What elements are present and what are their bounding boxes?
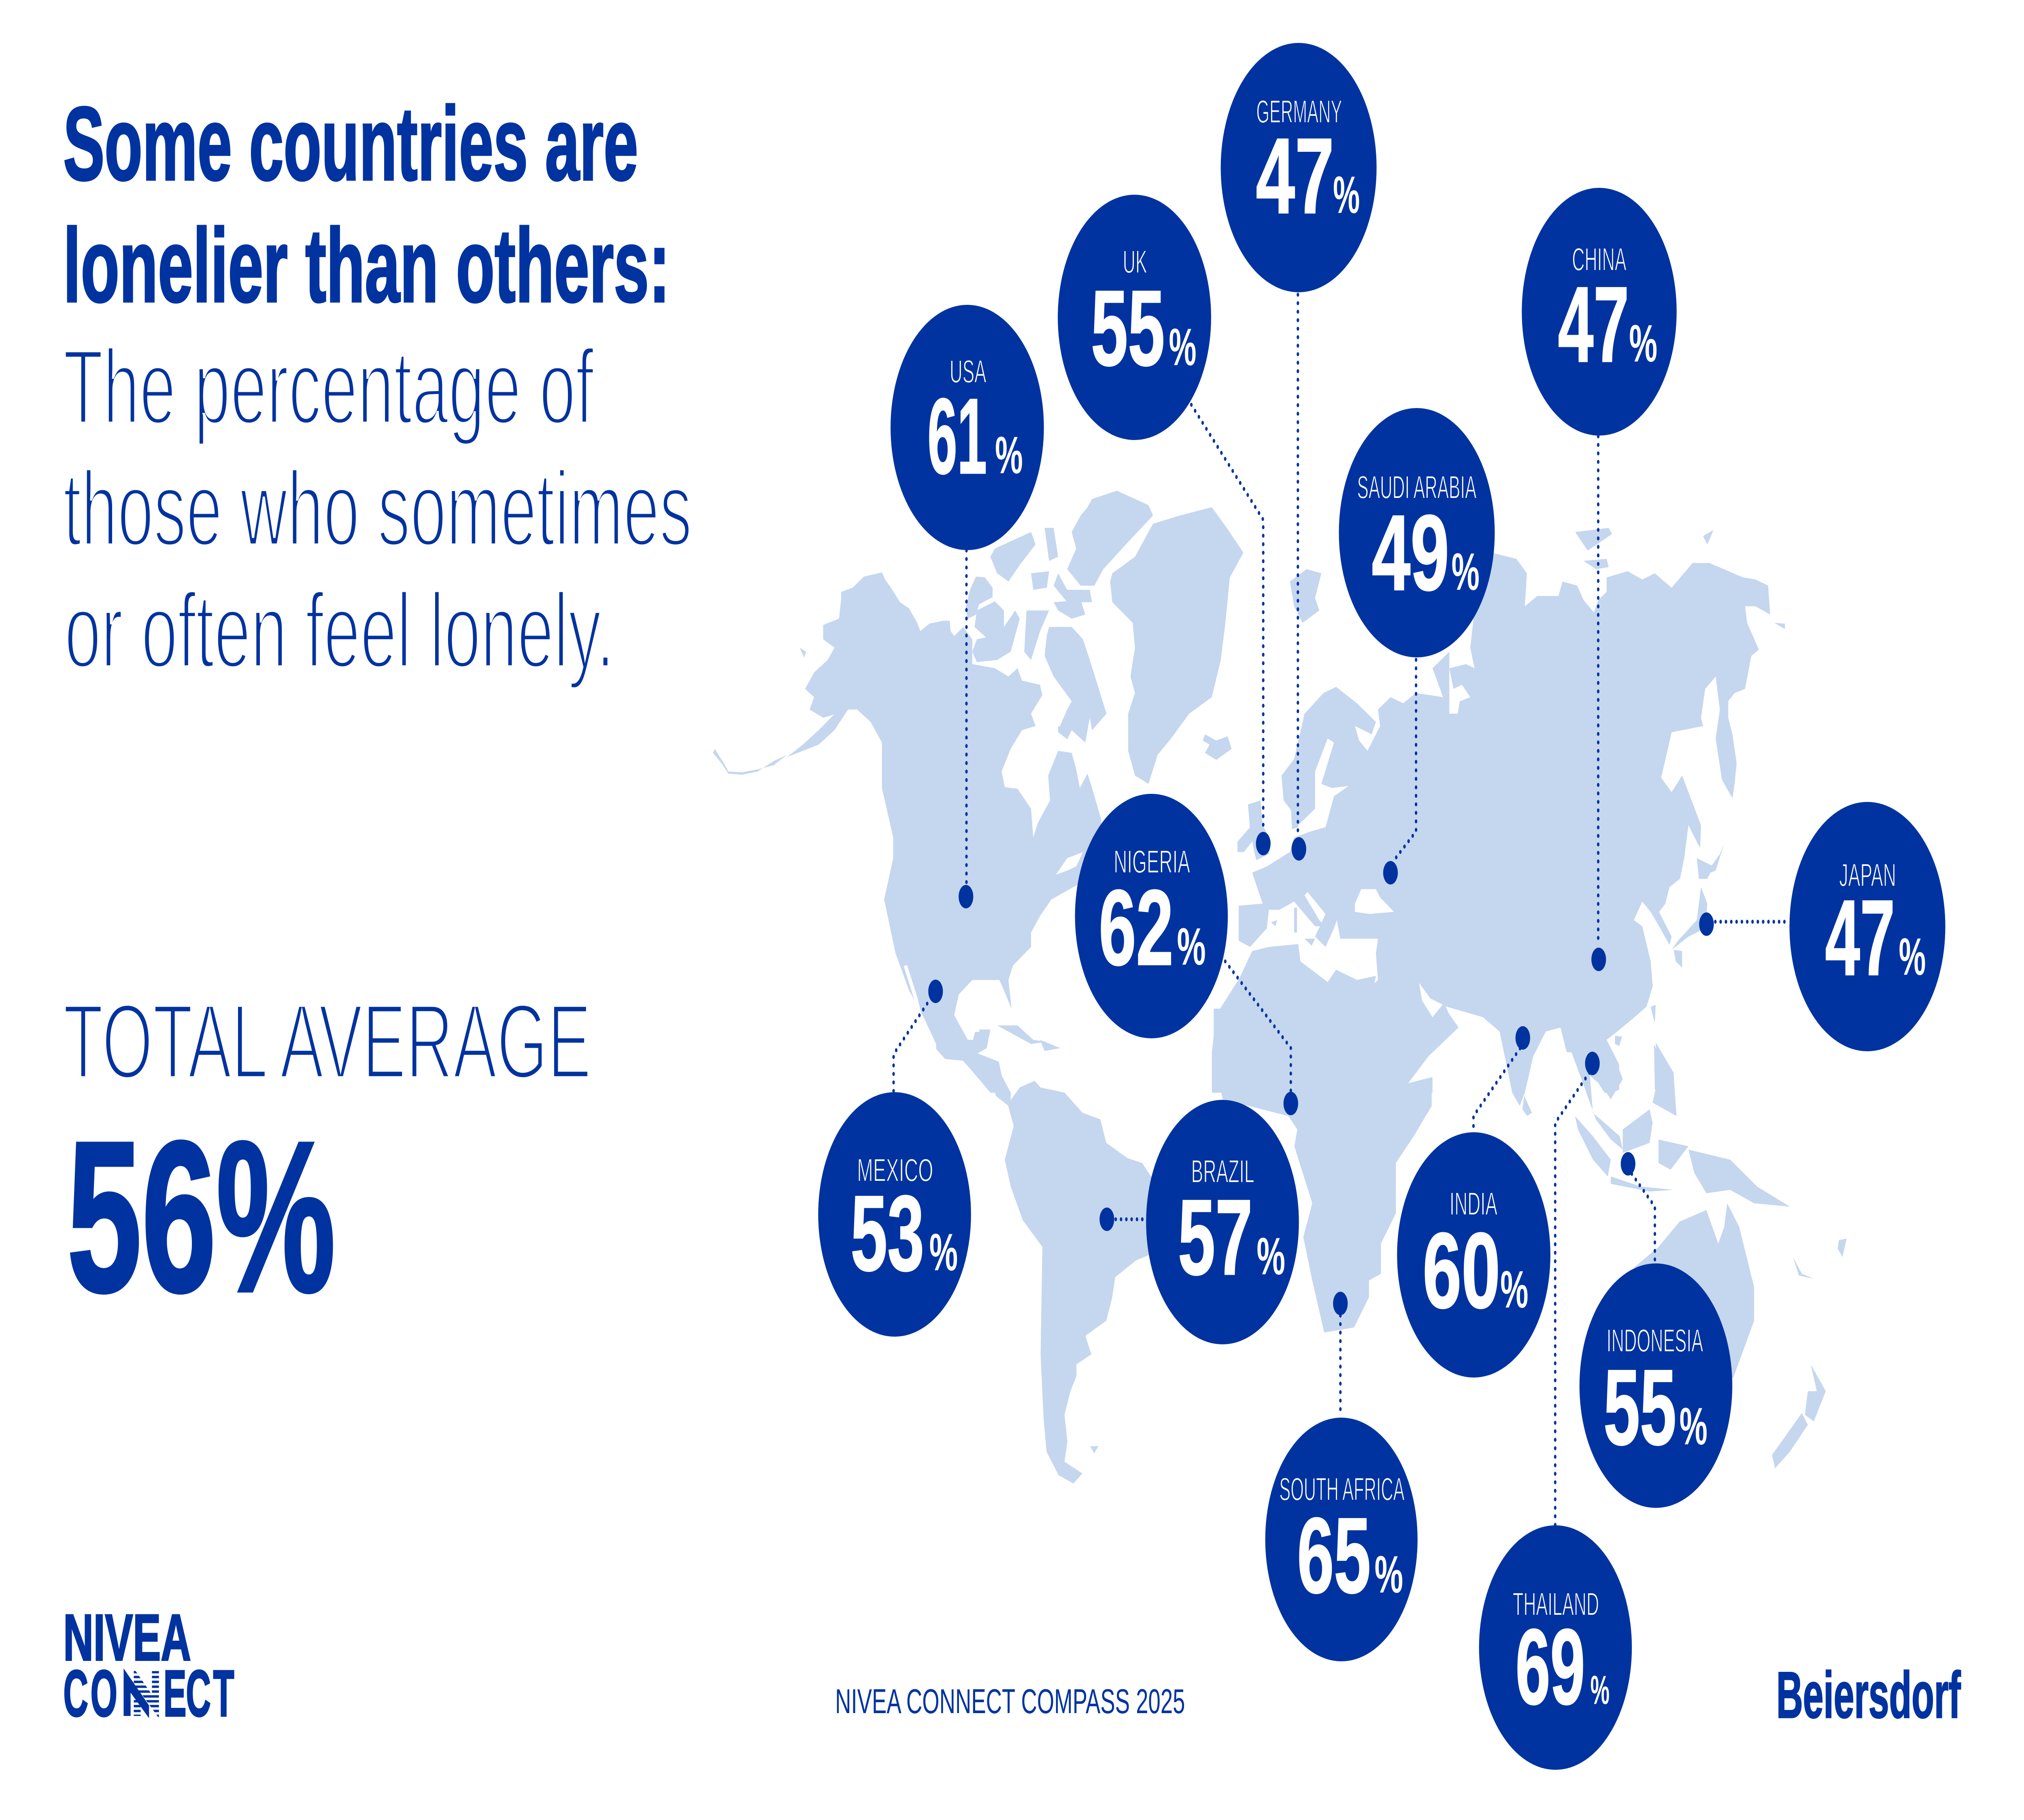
total average value: 56% bbox=[67, 1097, 336, 1337]
bubble: Nigeria bbox=[1075, 794, 1228, 1038]
bubble: South Africa: % bbox=[1375, 1545, 1403, 1604]
bubble: Thailand: THAILAND bbox=[1513, 1586, 1599, 1622]
bubble: Brazil: 57 bbox=[1178, 1177, 1252, 1297]
bubble: South Africa bbox=[1265, 1418, 1418, 1661]
bubble: Brazil: BRAZIL bbox=[1191, 1154, 1254, 1190]
total average label: TOTAL AVERAGE bbox=[63, 982, 591, 1101]
bubble: South Africa: SOUTH AFRICA bbox=[1279, 1471, 1405, 1507]
bubble: Saudi Arabia: % bbox=[1452, 542, 1480, 601]
bubble: Germany: % bbox=[1333, 165, 1360, 224]
bubble: Japan: % bbox=[1899, 927, 1926, 986]
bubble: Indonesia: % bbox=[1680, 1397, 1707, 1456]
bubble: Germany bbox=[1221, 43, 1377, 292]
bubble: Saudi Arabia: 49 bbox=[1372, 493, 1449, 612]
bubble: Saudi Arabia: SAUDI ARABIA bbox=[1357, 470, 1477, 506]
bubble: Thailand: % bbox=[1590, 1667, 1609, 1713]
title bbox=[63, 85, 692, 690]
world map bbox=[713, 491, 1847, 1484]
title: The percentage of bbox=[63, 328, 594, 446]
bubble: Saudi Arabia bbox=[1339, 408, 1495, 657]
bubble: South Africa: 65 bbox=[1297, 1495, 1371, 1615]
source line: NIVEA CONNECT COMPASS 2025 bbox=[835, 1682, 1185, 1721]
bubble: India: % bbox=[1500, 1260, 1529, 1319]
logo: beiersdorf: Beiersdorf bbox=[1776, 1658, 1961, 1732]
bubble: USA bbox=[891, 305, 1044, 550]
bubble: Nigeria: 62 bbox=[1099, 867, 1174, 987]
bubble: USA: 61 bbox=[927, 376, 987, 496]
bubble: UK: UK bbox=[1123, 244, 1147, 280]
bubble: Indonesia: 55 bbox=[1603, 1347, 1676, 1467]
map: gulf of california bbox=[906, 965, 921, 1017]
bubble: China: 47 bbox=[1558, 264, 1629, 384]
bubble: India bbox=[1397, 1132, 1550, 1378]
logo: nivea connect: NIVEA bbox=[63, 1601, 191, 1674]
map: north america and arctic bbox=[713, 491, 1244, 1093]
title: lonelier than others: bbox=[63, 207, 670, 324]
map: eurasia and north africa bbox=[1212, 528, 1785, 1106]
bubble: Japan: JAPAN bbox=[1839, 857, 1896, 893]
bubble: China: CHINA bbox=[1572, 242, 1626, 278]
title: or often feel lonely. bbox=[64, 572, 614, 690]
bubble: USA: USA bbox=[950, 354, 986, 390]
bubble: India: 60 bbox=[1422, 1210, 1500, 1330]
bubble: Thailand bbox=[1479, 1525, 1632, 1770]
leader lines bbox=[894, 295, 1790, 1525]
map: southern hemisphere bbox=[936, 1009, 1847, 1484]
title: Some countries are bbox=[63, 85, 638, 202]
bubble: Mexico: MEXICO bbox=[857, 1152, 933, 1189]
bubble: Germany: 47 bbox=[1256, 116, 1334, 236]
bubble: Indonesia: INDONESIA bbox=[1607, 1323, 1703, 1359]
bubble: Mexico: 53 bbox=[850, 1173, 924, 1293]
bubble: Nigeria: NIGERIA bbox=[1114, 844, 1190, 880]
bubble: China bbox=[1522, 188, 1677, 436]
bubble: India: INDIA bbox=[1450, 1186, 1497, 1222]
bubble: Indonesia bbox=[1580, 1263, 1732, 1508]
bubble: Japan: 47 bbox=[1825, 878, 1895, 997]
bubble: UK: 55 bbox=[1091, 268, 1165, 388]
bubble: Japan bbox=[1790, 802, 1945, 1051]
bubble: Brazil: % bbox=[1256, 1227, 1285, 1286]
bubble: UK: % bbox=[1169, 317, 1197, 376]
logo: nivea connect: CONNECT bbox=[63, 1657, 234, 1730]
bubble: Mexico bbox=[818, 1092, 971, 1337]
bubble: Brazil bbox=[1146, 1100, 1299, 1344]
logo: nivea connect bbox=[63, 1601, 234, 1730]
map: black sea bbox=[1355, 889, 1394, 914]
title: those who sometimes bbox=[63, 450, 692, 568]
map: st lawrence gulf bbox=[1056, 852, 1083, 875]
bubble: UK bbox=[1058, 195, 1211, 440]
bubble: Germany: GERMANY bbox=[1256, 94, 1342, 130]
bubble: Nigeria: % bbox=[1177, 917, 1206, 976]
location markers bbox=[928, 832, 1714, 1315]
bubble: USA: % bbox=[995, 425, 1023, 485]
bubble: China: % bbox=[1629, 314, 1657, 373]
bubble: Thailand: 69 bbox=[1516, 1607, 1585, 1726]
bubble: Mexico: % bbox=[929, 1223, 958, 1282]
